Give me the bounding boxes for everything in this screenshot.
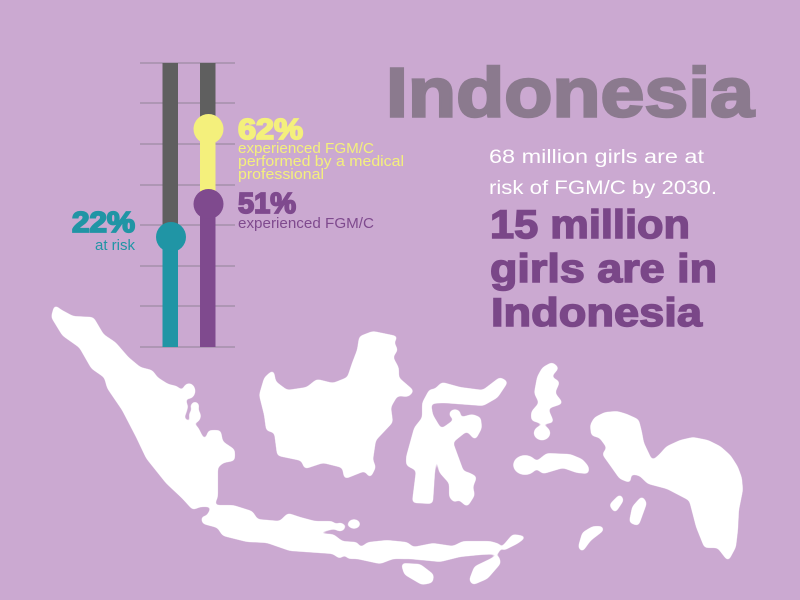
label: 51% experienced: 51% <box>238 188 296 220</box>
label: 62% medical professional: performed by a medical <box>238 153 404 170</box>
map of Indonesia <box>52 306 742 584</box>
small islands south of Papua <box>579 495 646 551</box>
island: Seram <box>537 454 588 473</box>
island: Alor <box>502 535 525 550</box>
island: near Sulawesi <box>450 410 460 418</box>
bar: at risk column <box>156 63 186 347</box>
label: 62% medical professional: experienced FGM/C <box>238 140 374 157</box>
small islands near Java <box>336 520 360 530</box>
chart: FGM/C thermometer bars <box>72 63 404 347</box>
label: 62% medical professional: 62% <box>238 114 303 146</box>
island: Sulawesi <box>407 378 507 506</box>
callout: 15 million girls <box>490 203 717 335</box>
island: Timor <box>470 556 500 584</box>
island: Papua <box>591 412 742 560</box>
label: 51% experienced: experienced FGM/C <box>238 215 374 232</box>
text block: 68 million at risk: 68 million girls are at <box>489 147 705 168</box>
islands near Sumatra <box>184 384 200 422</box>
label: 22% at risk <box>72 207 135 254</box>
island: Buru <box>514 456 536 474</box>
bar: experienced column <box>194 63 224 347</box>
text block: 68 million at risk <box>489 147 717 199</box>
callout: 15 million girls: 15 million <box>490 203 690 247</box>
title: Indonesia <box>386 54 755 132</box>
text block: 68 million at risk: risk of FGM/C by 2030. <box>489 178 717 199</box>
island: Halmahera <box>532 363 562 423</box>
label: 22% at risk: at risk <box>95 237 135 254</box>
callout: 15 million girls: girls are in <box>490 247 717 291</box>
label: 51% experienced <box>238 188 374 232</box>
island: Borneo <box>260 332 413 478</box>
island: Sumatra <box>52 306 234 509</box>
island: south of Halmahera <box>534 426 550 440</box>
island: Sumba <box>402 564 433 584</box>
label: 62% medical professional <box>238 114 404 183</box>
label: 22% at risk: 22% <box>72 207 135 239</box>
label: 62% medical professional: professional <box>238 166 324 183</box>
island: Java and Lesser Sunda chain <box>202 506 500 563</box>
callout: 15 million girls: Indonesia <box>491 291 703 335</box>
